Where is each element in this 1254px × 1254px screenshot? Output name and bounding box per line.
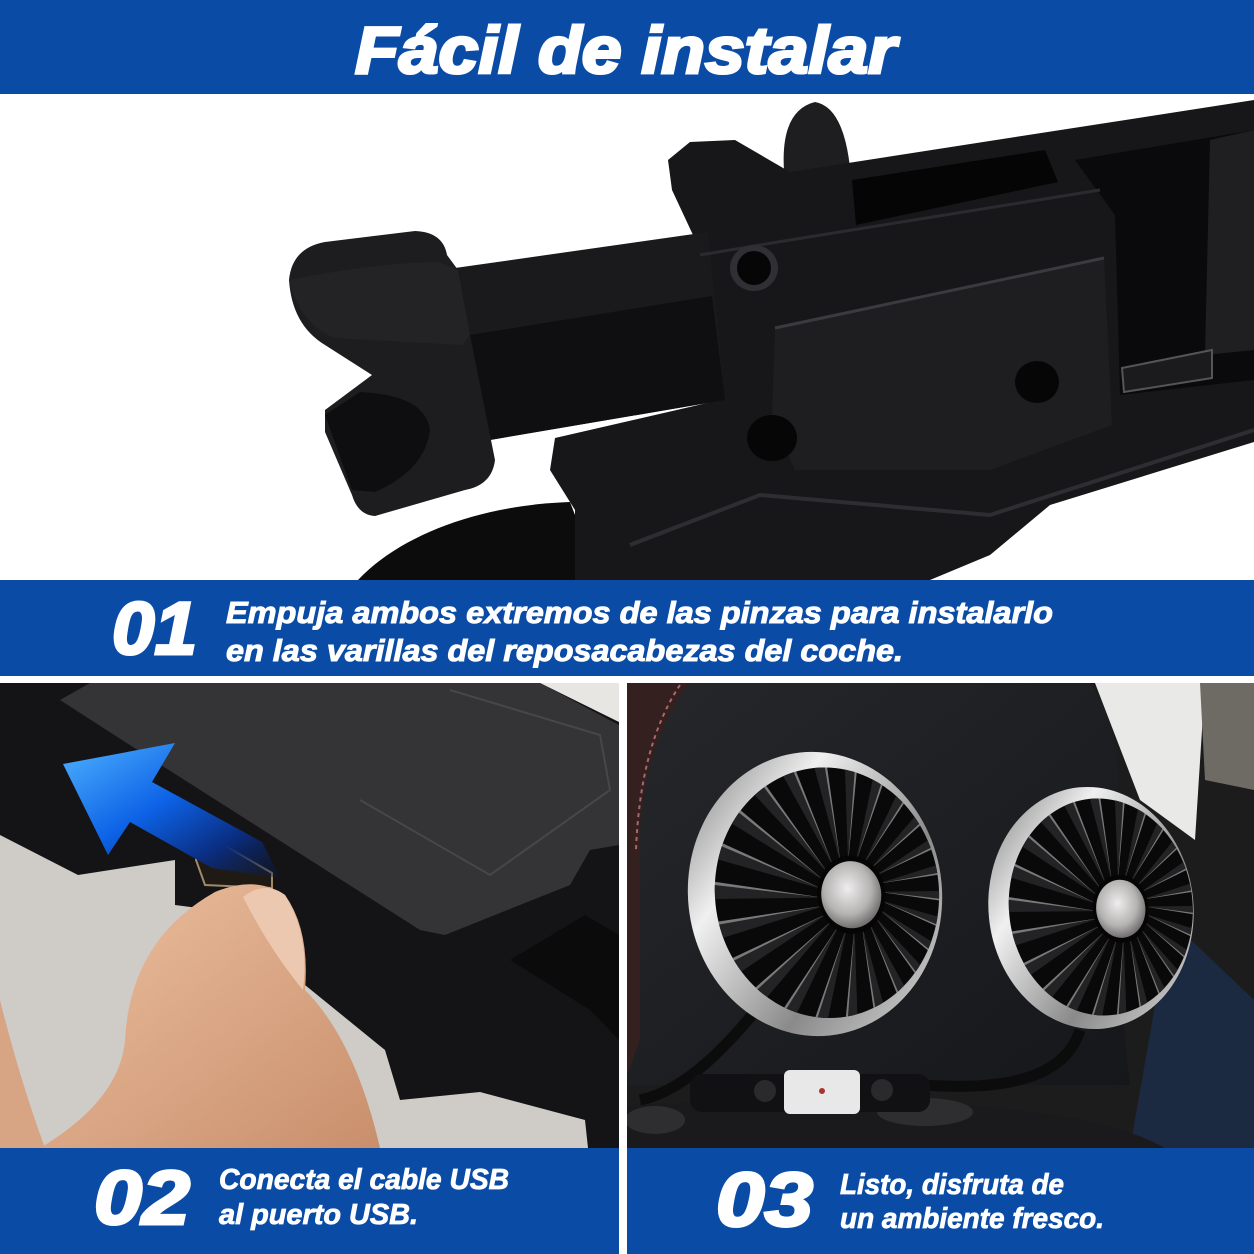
loop handle	[784, 102, 850, 172]
band: step 01	[0, 580, 1254, 676]
device body	[0, 683, 619, 1148]
icon: blue arrow	[63, 743, 280, 878]
controller	[690, 1070, 930, 1114]
headrest	[640, 683, 1001, 972]
top face	[60, 683, 619, 935]
text step 02 line 1: Conecta el cable USB	[219, 1164, 509, 1196]
port	[1122, 350, 1212, 392]
text step 03 line 2: un ambiente fresco.	[840, 1203, 1104, 1235]
text step 03 line 1: Listo, disfruta de	[840, 1169, 1064, 1201]
photo: fans on headrest	[625, 683, 1254, 1148]
arm	[455, 232, 725, 440]
photo: headrest bracket clamp	[289, 100, 1254, 580]
text step 02 line 2: al puerto USB.	[219, 1199, 418, 1231]
curved black cable base	[358, 502, 575, 580]
fan left	[688, 752, 942, 1036]
finger	[40, 884, 380, 1148]
USB port	[195, 848, 273, 889]
front plate	[772, 258, 1112, 470]
number 02: 02	[94, 1156, 190, 1241]
screw holes	[730, 245, 778, 291]
side bracket	[510, 915, 619, 1040]
text step 01 line 2: en las varillas del reposacabezas del coche.	[226, 633, 903, 668]
top slot	[852, 150, 1058, 225]
band: step 02	[0, 1148, 619, 1254]
header band	[0, 0, 1254, 94]
fan right	[988, 787, 1194, 1029]
mounts	[625, 1106, 685, 1134]
number 01: 01	[112, 587, 197, 670]
photo: USB port with finger	[0, 683, 619, 1148]
cable	[640, 1015, 752, 1100]
band: step 03	[627, 1148, 1254, 1254]
seat back	[1130, 1134, 1165, 1148]
text step 01 line 1: Empuja ambos extremos de las pinzas para instalarlo	[226, 595, 1053, 630]
title: Fácil de instalar	[355, 13, 900, 87]
number 03: 03	[716, 1158, 813, 1243]
clamp claw	[289, 231, 495, 516]
main housing	[550, 100, 1254, 580]
